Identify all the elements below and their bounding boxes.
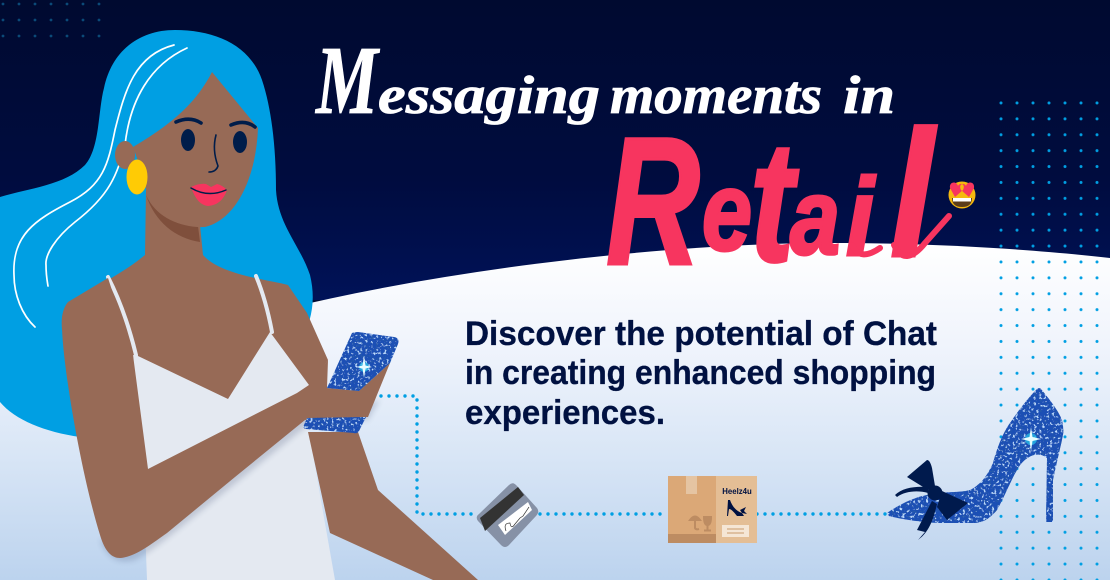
- bracelet: [303, 417, 366, 433]
- title: Messaging moments in: [315, 27, 895, 135]
- woman illustration: [0, 30, 478, 580]
- title: Messaging moments in: moments: [610, 65, 822, 125]
- neck and torso: [62, 190, 328, 470]
- lips: [191, 184, 227, 206]
- arm shadow: [100, 400, 380, 561]
- body text: [465, 315, 937, 432]
- title: Retail: e: [702, 149, 752, 274]
- magnetic strip: [480, 487, 524, 531]
- icon: parcel box: [668, 476, 757, 543]
- title: Messaging moments in: in: [843, 65, 895, 125]
- title: Retail: R: [606, 99, 700, 303]
- eyebrows: [176, 119, 255, 127]
- ear: [115, 141, 135, 169]
- phone sparkle: [356, 356, 372, 378]
- nose: [209, 135, 218, 172]
- dot grid: top left: [0, 0, 106, 42]
- title: Retail: t: [750, 106, 799, 298]
- earring: [126, 160, 148, 194]
- signature: [505, 507, 529, 531]
- body text: in creating enhanced shopping: [465, 354, 936, 392]
- left forearm: [308, 432, 478, 580]
- small shoe: [727, 500, 747, 516]
- handling symbols: [690, 516, 711, 530]
- background: night sky: [0, 0, 1110, 300]
- dot grid: right: [995, 97, 1105, 580]
- hair: [0, 30, 313, 437]
- title: Retail: a: [790, 156, 840, 277]
- dress straps: [108, 276, 272, 355]
- body text: Discover the potential of Chat: [465, 315, 937, 353]
- emoji: heart eyes: [948, 182, 976, 208]
- title: Messaging moments in: essaging: [378, 65, 600, 125]
- dotted connector line: [381, 396, 888, 514]
- title: Retail: l: [890, 94, 938, 295]
- dress: [133, 332, 335, 580]
- eyes: [181, 129, 247, 153]
- hair strands: [14, 45, 187, 327]
- face: [133, 72, 258, 227]
- background: white hill: [0, 243, 1110, 580]
- signature panel: [498, 502, 532, 535]
- box base band: [668, 534, 716, 543]
- label: [722, 525, 749, 537]
- mouth line: [191, 188, 226, 194]
- neck shadow: [146, 195, 200, 242]
- box tape: [686, 476, 697, 494]
- icon: glitter high heel: [887, 388, 1063, 540]
- body text: experiences.: [465, 394, 665, 432]
- title: Retail: i: [846, 156, 876, 279]
- title: Retail: [606, 94, 949, 303]
- box brand: Heelz4u: [722, 487, 752, 496]
- bow: [895, 460, 968, 540]
- icon: credit card: [477, 483, 538, 547]
- right arm: [62, 278, 390, 558]
- phone: [327, 332, 398, 391]
- shoe sparkle: [1021, 427, 1041, 451]
- title: Messaging moments in: M: [315, 27, 380, 135]
